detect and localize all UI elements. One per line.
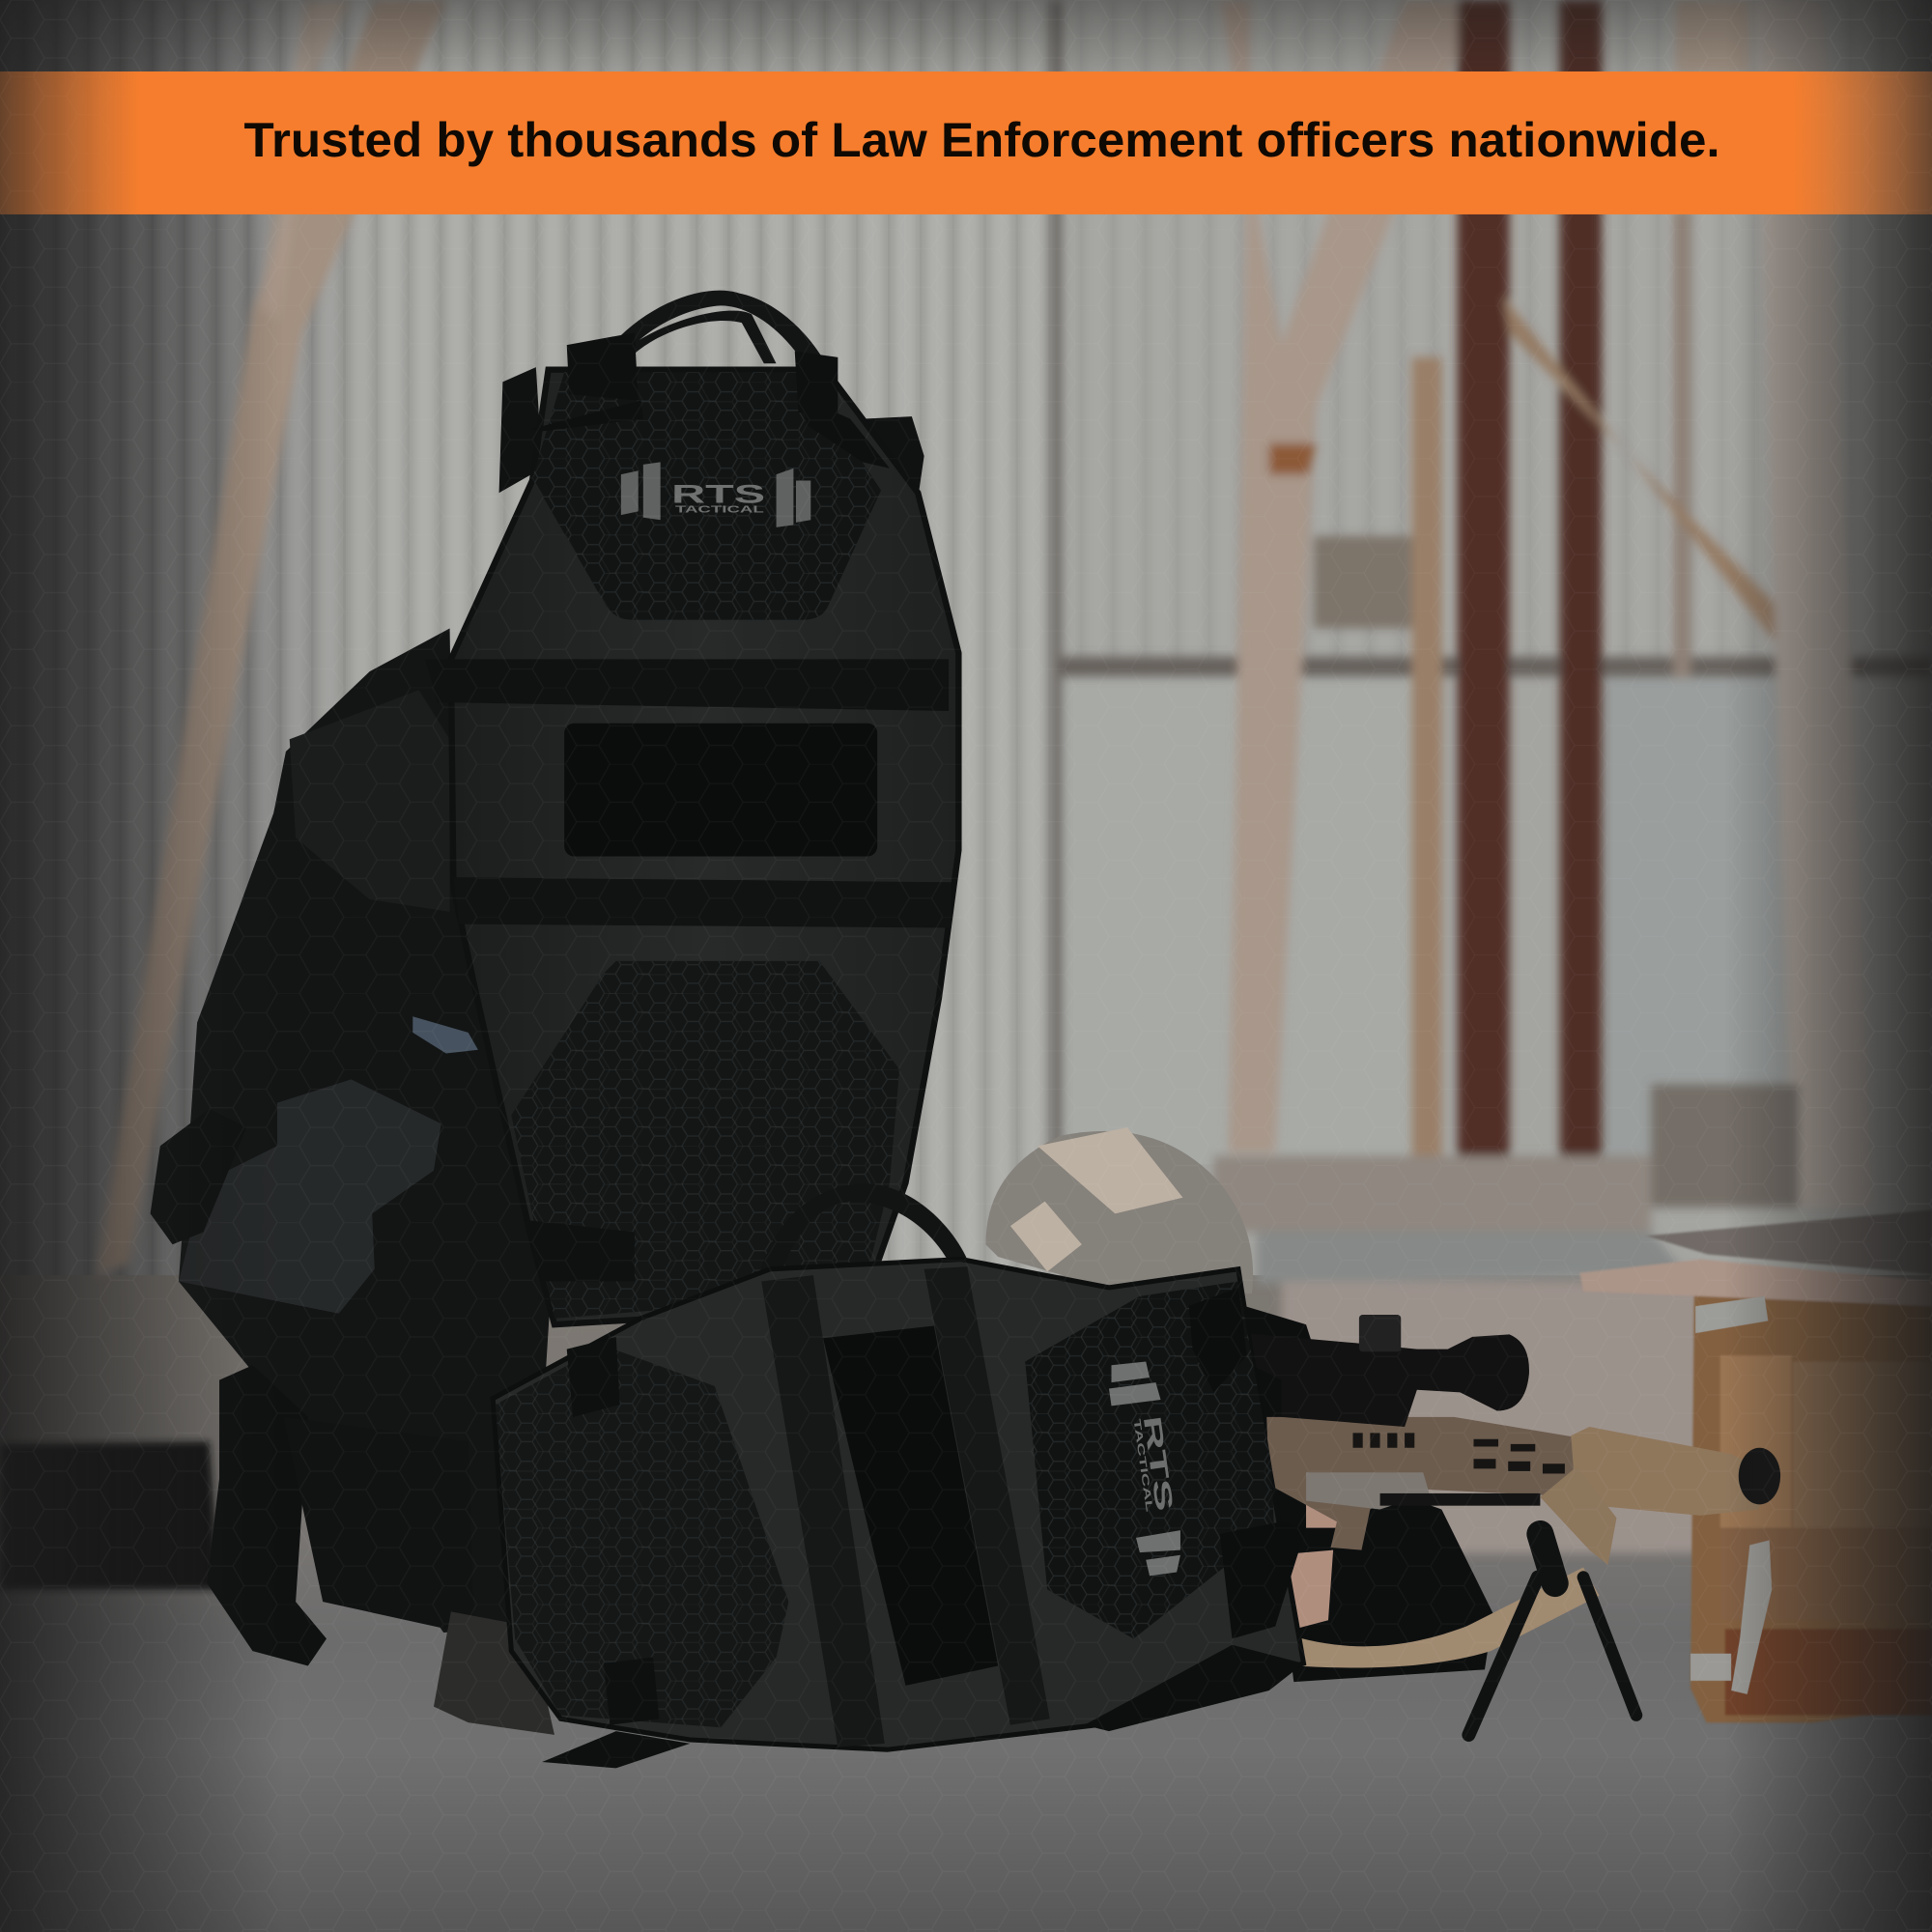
mesh edge <box>1084 1645 1303 1731</box>
holster and light <box>179 1079 441 1314</box>
scope turret <box>1359 1315 1401 1351</box>
standing ballistic shield bag <box>425 291 958 1324</box>
prone officer leg <box>0 1441 219 1589</box>
carry handles <box>589 291 832 382</box>
orange banner <box>0 71 1932 214</box>
pouch <box>151 1109 246 1244</box>
bipod <box>1468 1534 1636 1735</box>
velcro panel <box>564 724 877 856</box>
radio tag <box>412 1016 478 1054</box>
chassis slots <box>1353 1433 1565 1474</box>
helmet <box>985 1127 1253 1293</box>
suppressor cover <box>1571 1427 1759 1516</box>
logo: RTS Tactical <box>621 462 810 527</box>
lower bag logo: TACTICAL <box>1130 1418 1154 1513</box>
lower ballistic shield bag <box>493 1183 1306 1768</box>
officer pack panel <box>290 690 450 912</box>
officer arm and body <box>1244 1306 1493 1682</box>
lower bag velcro panel <box>823 1325 998 1686</box>
helmet patch <box>1010 1127 1182 1271</box>
second boot <box>434 1611 554 1735</box>
lower bag strap and buckle <box>542 1337 690 1768</box>
back padding <box>499 367 924 524</box>
shoulder strap at scope <box>1189 1288 1306 1638</box>
lower bag right hex panel <box>1025 1282 1274 1638</box>
lower webbing strap <box>453 877 952 927</box>
lower bag logo: RTS <box>1138 1414 1178 1513</box>
lower hex panel <box>511 961 899 1319</box>
tan wrap <box>1540 1466 1616 1565</box>
logo: RTS Tactical: TACTICAL <box>675 505 764 516</box>
shield body <box>451 370 958 1324</box>
grey receiver plate <box>1306 1472 1430 1509</box>
lower buckle strap <box>524 1220 635 1282</box>
lower bag webbing <box>761 1266 1050 1747</box>
top hex panel <box>532 372 881 620</box>
chassis <box>1266 1417 1587 1550</box>
lower bag logo <box>1109 1361 1180 1576</box>
muzzle <box>1739 1448 1780 1504</box>
metal bracket: lower <box>1690 1540 1772 1694</box>
shoulder straps <box>532 332 890 469</box>
officer boot <box>207 1365 327 1665</box>
lower bag left hex panel <box>496 1346 788 1727</box>
background: blurred poles and beams <box>96 0 1932 1552</box>
banner headline: Trusted by thousands of Law Enforcement officers nationwide. <box>244 112 1720 167</box>
scope <box>1244 1333 1529 1427</box>
sling <box>1282 1567 1600 1667</box>
logo: RTS Tactical: RTS <box>671 479 765 508</box>
officer torso and back <box>179 629 554 1633</box>
lower bag handle <box>757 1183 967 1288</box>
metal bracket: upper <box>1695 1296 1768 1333</box>
rifle, arm, sling and bipod <box>1244 1306 1780 1735</box>
kneeling officer behind the shield <box>0 629 554 1735</box>
handguard rail <box>1380 1493 1540 1506</box>
officer leg <box>283 1417 474 1635</box>
upper webbing strap <box>425 659 949 711</box>
crate with planks and metal brackets <box>1579 1210 1932 1722</box>
lower bag body <box>493 1260 1303 1749</box>
hands <box>1275 1501 1365 1633</box>
